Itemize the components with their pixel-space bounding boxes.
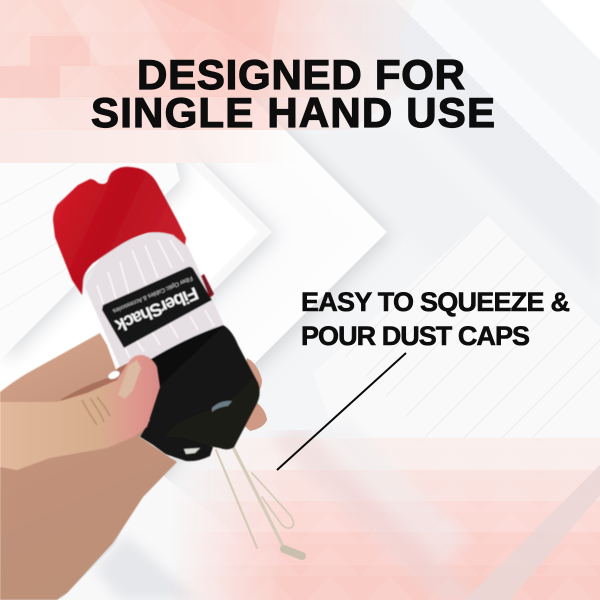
knuckle creases	[82, 397, 110, 425]
lower facet	[165, 378, 260, 449]
finger shadow crease	[60, 362, 130, 408]
hand	[0, 333, 177, 600]
body highlight	[212, 401, 232, 412]
title: DESIGNED FOR	[137, 51, 465, 98]
chevron: inner outer-edge	[0, 0, 272, 504]
lower grey diagonal band	[95, 535, 200, 600]
lower white region	[60, 465, 320, 600]
title: SINGLE HAND USE	[91, 89, 495, 136]
bottle	[53, 167, 260, 461]
callout line	[277, 353, 406, 470]
bottom pink mosaic	[170, 420, 600, 600]
lined panel right	[313, 215, 600, 485]
title	[91, 51, 495, 136]
callout text: POUR DUST CAPS	[301, 321, 530, 351]
clear tube with fibers	[85, 232, 224, 372]
logo mark	[201, 274, 214, 298]
thumb nail	[118, 360, 141, 399]
callout text	[301, 287, 570, 351]
brand text: FiberShack	[112, 283, 201, 336]
top-left pink mosaic	[0, 0, 415, 130]
palm and fingers	[0, 333, 177, 600]
right pale diagonal band	[320, 415, 470, 565]
red cap	[53, 167, 186, 295]
black lower cap piece	[140, 437, 213, 461]
nozzle detail	[184, 448, 200, 454]
gap between fingers	[107, 369, 121, 381]
thumb	[0, 355, 160, 470]
callout text: EASY TO SQUEEZE &	[301, 287, 570, 317]
label	[102, 267, 214, 348]
diagonal bands top right	[310, 0, 600, 290]
tagline text: Fiber Optic Cables & Accessories	[112, 274, 193, 313]
fingers behind the bottle	[238, 358, 267, 431]
faint pink row	[0, 130, 300, 163]
chevron: middle	[0, 0, 353, 600]
dust caps	[216, 447, 302, 556]
black lower body	[130, 325, 260, 449]
chevron: inner	[0, 0, 258, 490]
chevron: outer	[0, 0, 387, 600]
left lined panel	[0, 100, 180, 360]
